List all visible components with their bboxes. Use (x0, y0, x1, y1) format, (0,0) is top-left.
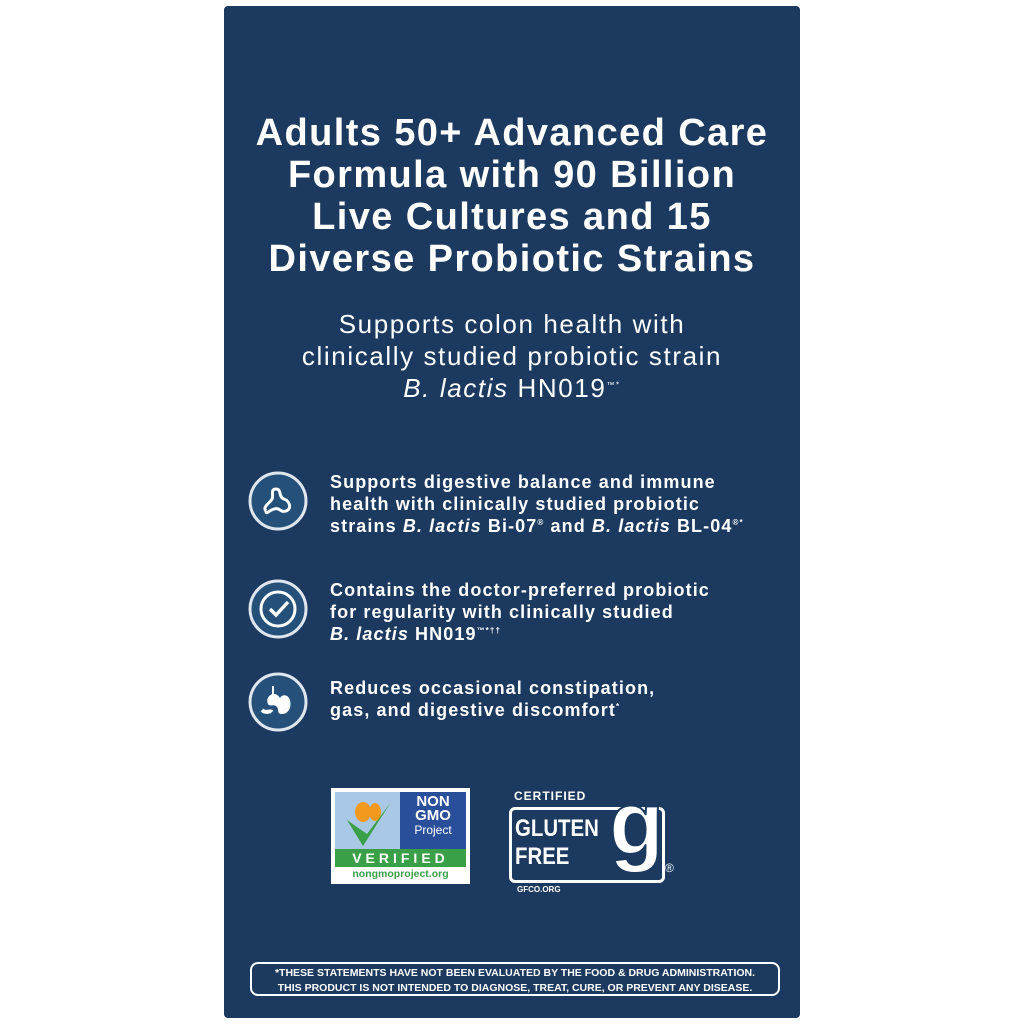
logo: gluten free: GLUTEN (515, 815, 599, 842)
logo: non-GMO: NON (416, 793, 450, 810)
title: Adults 50+ Advanced Care (256, 112, 768, 154)
benefit 1: strains B. lactis Bi-07® and B. lactis BL-04®* (330, 516, 744, 536)
panel: product info (224, 6, 800, 1018)
logo: non-GMO: Project (414, 823, 452, 837)
logo: gluten free (509, 774, 674, 894)
logo: gluten free: GFCO.ORG (517, 885, 561, 894)
benefit 3: Reduces occasional constipation, (330, 678, 655, 698)
benefit 2: B. lactis HN019™*†† (330, 624, 501, 644)
logo: non-GMO (331, 788, 470, 884)
logo: gluten free: ® (665, 861, 674, 875)
title: Diverse Probiotic Strains (269, 238, 755, 280)
benefit 2: Contains the doctor-preferred probiotic (330, 580, 710, 600)
title: Live Cultures and 15 (312, 196, 712, 238)
disclaimer: *THESE STATEMENTS HAVE NOT BEEN EVALUATED BY THE FOOD & DRUG ADMINISTRATION. (275, 967, 755, 979)
title (256, 112, 768, 280)
disclaimer (250, 962, 780, 996)
benefit 1 (248, 472, 744, 536)
logo: non-GMO: nongmoproject.org (352, 868, 449, 880)
icon: strains (248, 472, 308, 530)
title: Formula with 90 Billion (288, 154, 736, 196)
benefit 1: health with clinically studied probiotic (330, 494, 700, 514)
subtitle: B. lactis HN019™* (403, 373, 621, 403)
logo: gluten free: FREE (515, 843, 569, 870)
disclaimer: THIS PRODUCT IS NOT INTENDED TO DIAGNOSE, TREAT, CURE, OR PREVENT ANY DISEASE. (278, 982, 752, 994)
icon: check (248, 580, 308, 638)
subtitle: Supports colon health with (339, 309, 685, 339)
benefit 3 (248, 672, 655, 732)
benefit 2: for regularity with clinically studied (330, 602, 674, 622)
logo: gluten free: g (609, 774, 664, 874)
logo: gluten free: CERTIFIED (514, 789, 586, 803)
logo: non-GMO: VERIFIED (352, 850, 449, 866)
benefit 3: gas, and digestive discomfort* (330, 700, 620, 720)
subtitle (302, 309, 722, 403)
benefit 1: Supports digestive balance and immune (330, 472, 716, 492)
subtitle: clinically studied probiotic strain (302, 341, 722, 371)
icon: stomach (248, 672, 308, 732)
benefit 2 (248, 580, 710, 644)
logo: non-GMO: GMO (415, 807, 451, 824)
